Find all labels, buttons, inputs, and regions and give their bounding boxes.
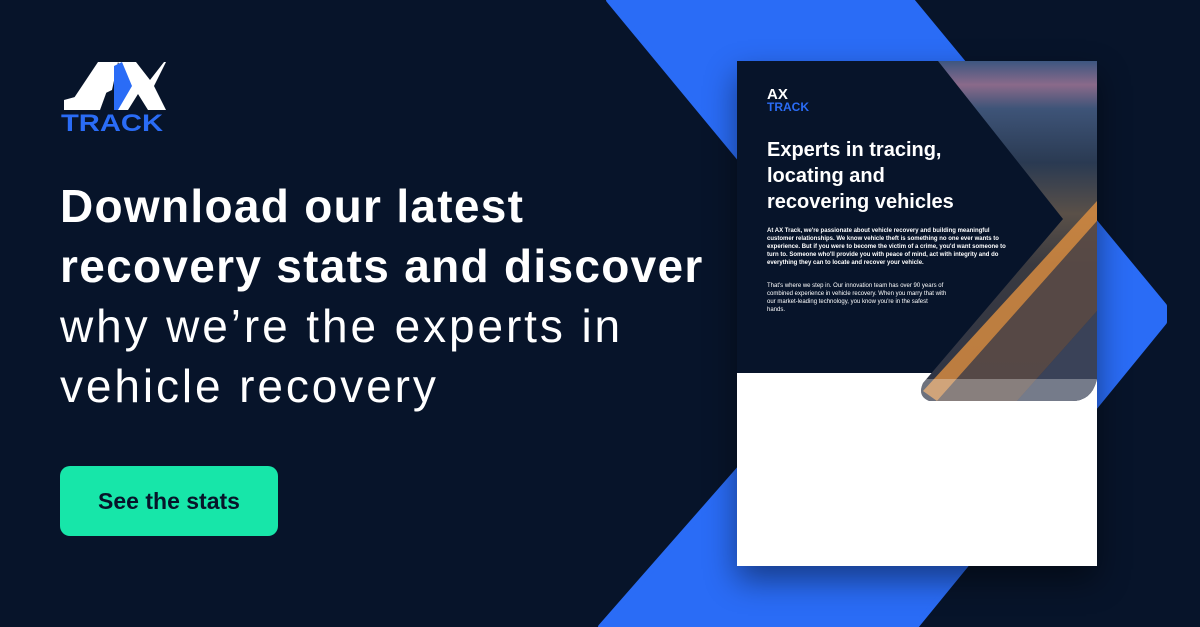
button: See the stats (98, 488, 240, 514)
brochure title: locating and (767, 165, 885, 187)
brochure document (737, 61, 1097, 566)
logo (61, 62, 166, 134)
headline: recovery stats and discover (60, 240, 704, 292)
headline: Download our latest (60, 180, 524, 232)
brochure body text: At AX Track, we're passionate about vehicle recovery and building meaningful customer relationships. We know vehicle theft is something no one ever wants to experience. But if you were to become the victim of a crime, you'd want someone to turn to. Someone who'll provide you with peace of mind, act with integrity and do everything they can to locate and recover your vehicle. (767, 228, 1006, 266)
brochure title: Experts in tracing, (767, 139, 942, 161)
brochure logo: AX (767, 86, 788, 103)
button (60, 466, 278, 536)
brochure title: recovering vehicles (767, 191, 954, 213)
brochure dark header (737, 61, 1097, 373)
brochure title (767, 139, 954, 213)
brochure logo (767, 86, 809, 114)
brochure document: That's where we step in. Our innovation team has over 90 years of combined experience in vehicle recovery. When you marry that with our market-leading technology, you know you're in the safest hands. (767, 283, 946, 313)
brochure logo: TRACK (767, 100, 809, 114)
brochure photo (921, 61, 1097, 401)
headline: why we’re the experts in (60, 300, 623, 352)
headline (60, 180, 704, 412)
headline: vehicle recovery (60, 360, 439, 412)
